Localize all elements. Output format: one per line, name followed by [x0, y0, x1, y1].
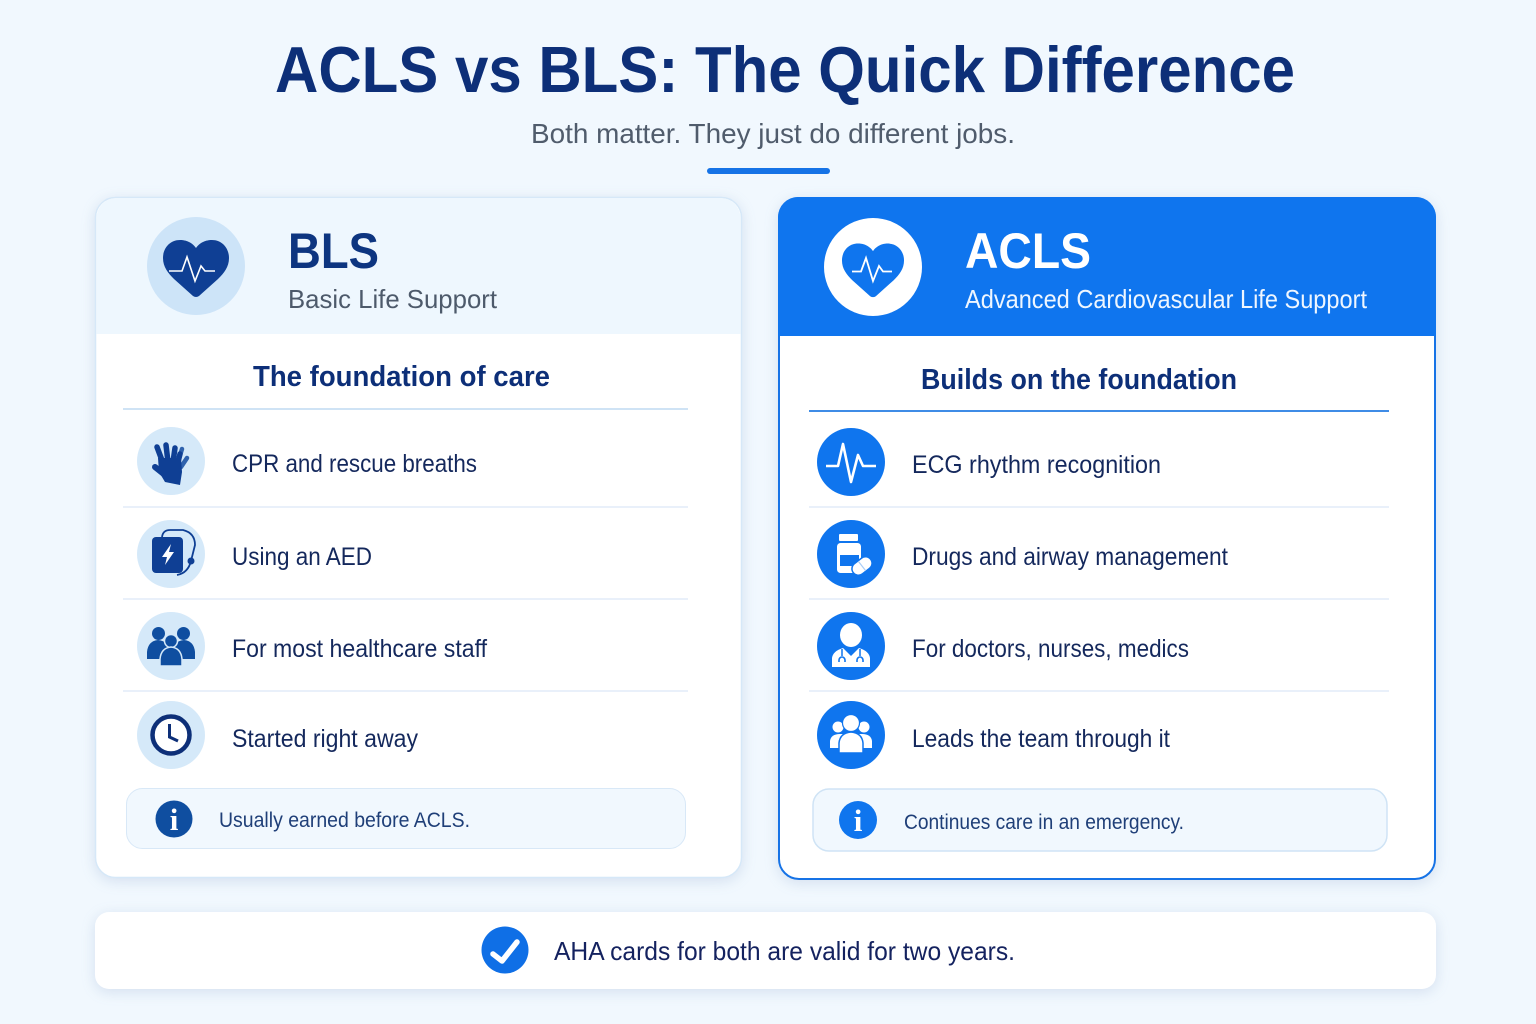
item text: team: Leads the team through it	[912, 725, 1170, 753]
icon: doctor	[817, 612, 885, 680]
icon: team	[817, 701, 885, 769]
icon: info: i	[854, 803, 863, 838]
icon: gloved hands	[137, 427, 205, 495]
ACLS full name: Advanced Cardiovascular Life Support	[965, 284, 1368, 314]
ACLS heading: ACLS	[965, 223, 1091, 279]
title underline accent	[707, 168, 830, 174]
BLS header band	[96, 198, 740, 334]
item text: timing: Started right away	[232, 725, 418, 753]
item text: ECG: ECG rhythm recognition	[912, 451, 1161, 479]
callout: ACLS note	[813, 789, 1387, 851]
subtitle: Both matter. They just do different jobs.	[531, 118, 1015, 149]
icon: ACLS heart	[824, 218, 922, 316]
ACLS card background	[779, 198, 1435, 879]
panel: footer validity banner	[95, 912, 1436, 989]
ACLS section heading: Builds on the foundation	[921, 364, 1237, 396]
item text: AED: Using an AED	[232, 543, 372, 571]
BLS full name: Basic Life Support	[288, 284, 498, 314]
item text: doctors: For doctors, nurses, medics	[912, 635, 1189, 663]
panel: BLS	[96, 198, 742, 878]
footer text: AHA cards for both are valid for two years.	[554, 936, 1015, 966]
note text: Usually earned before ACLS.	[219, 809, 470, 832]
icon: AED	[137, 520, 205, 588]
BLS heading: BLS	[288, 223, 379, 279]
BLS card background	[96, 198, 742, 878]
icon: staff group	[137, 612, 205, 680]
ACLS header band	[778, 197, 1436, 336]
title: ACLS vs BLS: The Quick Difference	[275, 33, 1295, 106]
callout: BLS note	[126, 788, 686, 848]
icon: info: i	[170, 802, 179, 837]
icon: info	[156, 800, 192, 838]
icon: check mark	[482, 926, 528, 974]
item text: drugs: Drugs and airway management	[912, 543, 1228, 571]
BLS section heading: The foundation of care	[253, 361, 550, 393]
icon: clock	[137, 701, 205, 769]
icon: BLS heart	[147, 217, 245, 315]
item text: CPR: CPR and rescue breaths	[232, 450, 477, 478]
item text: staff: For most healthcare staff	[232, 635, 487, 663]
icon: medicine bottle and pill	[817, 520, 885, 588]
panel: ACLS	[778, 197, 1436, 879]
icon: info	[839, 801, 877, 839]
note text: Continues care in an emergency.	[904, 811, 1184, 834]
icon: ECG	[817, 428, 885, 496]
